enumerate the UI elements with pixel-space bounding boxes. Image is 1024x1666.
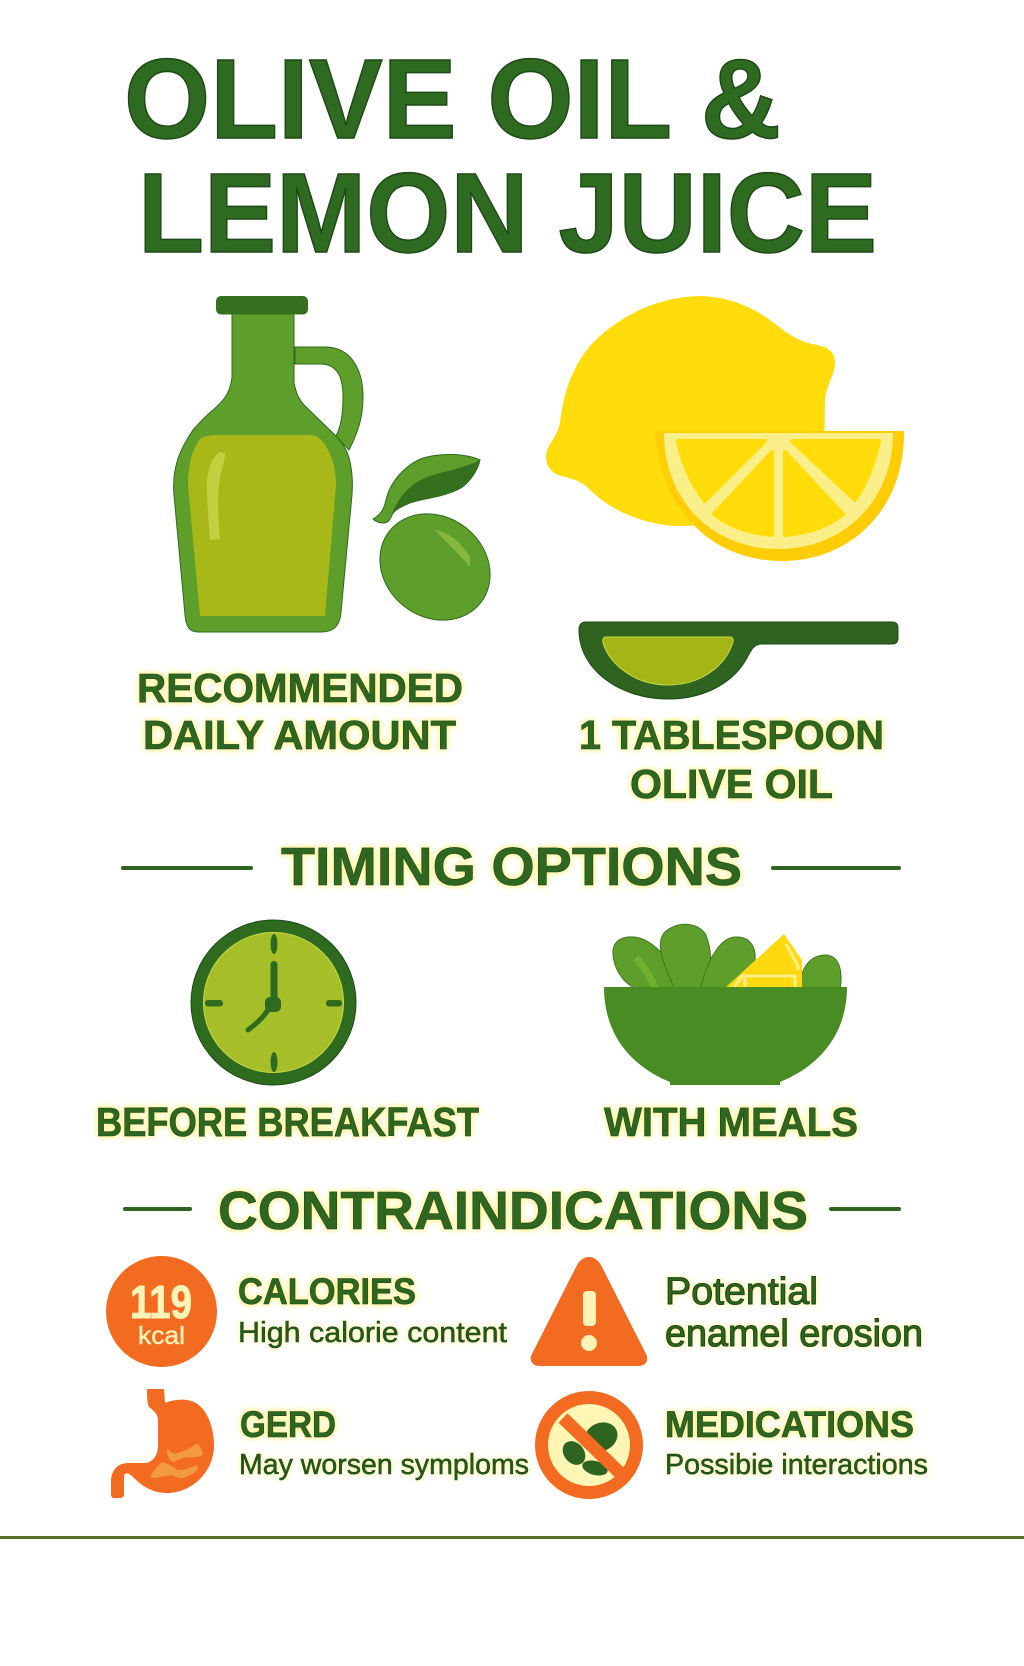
- label: 1 tablespoon olive oil: [579, 712, 884, 807]
- item: enamel erosion: [531, 1257, 923, 1366]
- title: [124, 36, 877, 276]
- title: OLIVE OIL &: [124, 36, 781, 162]
- calories text: CALORIES: [238, 1270, 416, 1312]
- medications text: [665, 1403, 928, 1481]
- label: before breakfast: BEFORE BREAKFAST: [96, 1099, 479, 1145]
- gerd text: [239, 1403, 529, 1481]
- label: with meals: WITH MEALS: [604, 1099, 858, 1145]
- medications text: Possibie interactions: [665, 1449, 928, 1481]
- label: 1 tablespoon olive oil: 1 TABLESPOON: [579, 712, 884, 758]
- label: recommended daily amount: RECOMMENDED: [137, 665, 463, 711]
- icon: stomach: [111, 1389, 214, 1498]
- icon: salad bowl: [604, 924, 847, 1085]
- icon: no pills: [535, 1391, 643, 1499]
- icon: olive oil bottle: [174, 296, 363, 632]
- icon: warning triangle: [531, 1257, 647, 1366]
- enamel text: enamel erosion: [665, 1313, 923, 1355]
- heading: timing options: TIMING OPTIONS: [281, 837, 742, 897]
- item: gerd: [111, 1389, 529, 1498]
- heading: contraindications: CONTRAINDICATIONS: [218, 1181, 808, 1241]
- enamel text: [665, 1271, 923, 1355]
- enamel text: Potential: [665, 1271, 818, 1313]
- label: recommended daily amount: [137, 665, 463, 758]
- icon: olive with leaf: [359, 454, 511, 642]
- label: recommended daily amount: DAILY AMOUNT: [143, 712, 456, 758]
- medications text: MEDICATIONS: [665, 1403, 914, 1445]
- title: LEMON JUICE: [138, 150, 877, 276]
- icon: 119 kcal badge: kcal: [138, 1322, 185, 1350]
- label: 1 tablespoon olive oil: OLIVE OIL: [630, 761, 833, 807]
- calories text: [238, 1270, 507, 1349]
- gerd text: GERD: [240, 1403, 336, 1445]
- icon: 119 kcal badge: 119: [130, 1276, 192, 1328]
- calories text: High calorie content: [238, 1317, 507, 1349]
- icon: clock: [191, 920, 356, 1085]
- item: medications: [535, 1391, 928, 1499]
- icon: lemon with slice: [546, 296, 904, 561]
- icon: 119 kcal badge: [106, 1256, 217, 1367]
- heading: timing options: [121, 837, 901, 897]
- gerd text: May worsen symploms: [239, 1449, 529, 1481]
- item: calories: [106, 1256, 507, 1367]
- icon: tablespoon: [579, 622, 898, 699]
